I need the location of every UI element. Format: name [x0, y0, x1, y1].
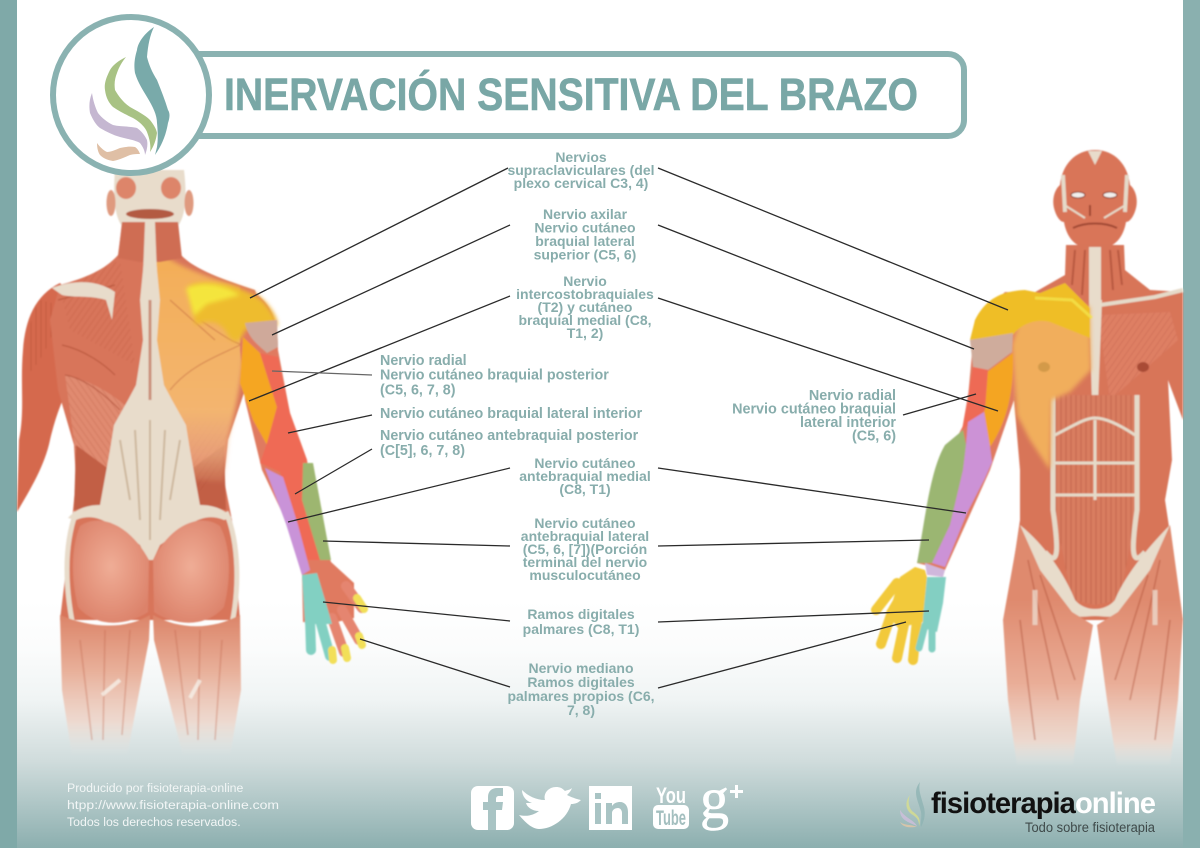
back of arm, right side	[240, 285, 354, 624]
label: ramos digitales: Ramos digitales	[527, 606, 635, 622]
green zone	[302, 463, 331, 560]
footer credits: Todos los derechos reservados.	[67, 815, 241, 829]
upper back muscle fibres	[60, 260, 135, 365]
label: antebraquial posterior: (C[5], 6, 7, 8)	[380, 443, 465, 459]
clavicle	[1100, 290, 1183, 305]
logo flame green	[105, 57, 157, 152]
logo flame teal	[134, 27, 170, 155]
hand red fingers	[332, 586, 362, 652]
taupe zone front	[970, 333, 1013, 370]
green zone front	[917, 430, 966, 563]
orange chest zone	[1012, 306, 1091, 470]
label: radial right: Nervio radial	[809, 388, 896, 404]
shoulder gold zone	[190, 283, 277, 341]
label: radial right: (C5, 6)	[852, 428, 896, 444]
label: axilar: Nervio axilar	[543, 206, 628, 222]
label: radial posterior: Nervio cutáneo braquial posterior	[380, 368, 609, 384]
orange arm zone	[240, 337, 277, 445]
label: intercostobraquiales: intercostobraquiales	[516, 286, 654, 302]
footer credits: htpp://www.fisioterapia-online.com	[67, 798, 279, 812]
teal zone	[302, 573, 332, 624]
label: antebraquial medial: Nervio cutáneo	[534, 455, 636, 471]
head front	[1053, 150, 1137, 246]
icon: youtube	[653, 783, 689, 830]
glutes	[73, 520, 149, 623]
brand logo	[900, 782, 1156, 835]
label: nervio mediano: 7, 8)	[567, 702, 595, 718]
back torso	[50, 225, 270, 620]
label: supraclaviculares: supraclaviculares (del	[507, 162, 655, 178]
logo flame tan	[97, 143, 140, 161]
figure: back view of the body	[17, 170, 364, 756]
right thigh	[1097, 525, 1183, 766]
spine tendon	[68, 250, 232, 560]
label: radial right: Nervio cutáneo braquial	[732, 402, 896, 418]
page background gradient	[0, 600, 1200, 848]
brand name: fisioterapiaonline	[931, 787, 1155, 820]
icon: youtube: You	[656, 783, 686, 808]
orange back zone	[150, 255, 277, 482]
label: supraclaviculares: Nervios	[555, 149, 607, 165]
label: nervio mediano: palmares propios (C6,	[507, 688, 655, 704]
chest right half	[1098, 312, 1178, 400]
torso and neck front	[1005, 245, 1183, 620]
label: radial posterior: Nervio radial	[380, 353, 467, 369]
back arm, left side	[17, 283, 75, 512]
central tendon	[1089, 300, 1102, 405]
label: ramos digitales: palmares (C8, T1)	[523, 621, 639, 637]
abdominals	[1052, 395, 1138, 605]
label: axilar: Nervio cutáneo	[534, 220, 636, 236]
logo circle	[53, 17, 209, 173]
purple zone	[265, 468, 310, 575]
label: antebraquial lateral: terminal del nervio	[523, 554, 647, 570]
left-aligned labels	[380, 353, 643, 459]
label: nervio mediano: Ramos digitales	[527, 674, 635, 690]
teal zone front	[919, 577, 946, 649]
yellow hand zone	[876, 567, 927, 660]
label: radial right	[732, 388, 896, 444]
head back	[114, 170, 186, 240]
centre labels	[507, 149, 655, 718]
purple zone front	[932, 412, 992, 567]
icon: facebook	[471, 786, 514, 830]
brand mark	[900, 782, 925, 827]
red zone front	[962, 367, 988, 430]
leader lines	[249, 168, 1008, 688]
label: antebraquial lateral: Nervio cutáneo	[534, 515, 636, 531]
label: antebraquial lateral: antebraquial lateral	[521, 528, 649, 544]
label: intercostobraquiales: (T2) y cutáneo	[538, 299, 632, 315]
label: supraclaviculares: plexo cervical C3, 4)	[514, 175, 648, 191]
wrist lavender zone	[925, 563, 945, 577]
arm base front	[917, 292, 1032, 570]
logo flame purple	[89, 93, 147, 155]
yellow shoulder highlight	[186, 284, 240, 316]
label: axilar: superior (C5, 6)	[534, 246, 636, 262]
hamstrings	[60, 615, 150, 756]
title: INERVACIÓN SENSITIVA DEL BRAZO	[224, 69, 918, 120]
footer credits: Producido por fisioterapia-online	[67, 781, 244, 795]
label: intercostobraquiales: braquial medial (C8,	[518, 312, 652, 328]
icon: youtube: Tube	[656, 807, 686, 830]
label: lateral interior: Nervio cutáneo braquial lateral interior	[380, 406, 643, 422]
left side bar	[0, 0, 17, 848]
label: nervio mediano: Nervio mediano	[528, 660, 634, 676]
yellow shoulder zone front	[970, 283, 1090, 340]
brand tagline: Todo sobre fisioterapia	[1025, 820, 1156, 835]
label: intercostobraquiales: Nervio	[563, 273, 607, 289]
orange arm zone front	[984, 353, 1013, 447]
left thigh	[1003, 525, 1093, 766]
icon: google plus: g	[700, 766, 729, 831]
taupe zone	[245, 320, 278, 353]
social icons	[471, 766, 743, 831]
yellow finger tips	[332, 598, 364, 660]
label: axilar: braquial lateral	[535, 233, 635, 249]
red zone	[260, 353, 320, 560]
label: intercostobraquiales: T1, 2)	[567, 325, 603, 341]
right side bar	[1183, 0, 1200, 848]
label: radial right: lateral interior	[800, 415, 896, 431]
neck tendon	[1089, 247, 1101, 300]
neck	[118, 222, 182, 262]
figure: front view of the body	[876, 150, 1183, 766]
title frame	[170, 54, 964, 136]
hip tendon edges	[67, 512, 237, 640]
icon: twitter	[519, 787, 581, 829]
label: antebraquial lateral: musculocutáneo	[529, 567, 641, 583]
label: antebraquial posterior: Nervio cutáneo antebraquial posterior	[380, 428, 639, 444]
scapula tendon	[52, 282, 115, 320]
label: radial posterior: (C5, 6, 7, 8)	[380, 382, 456, 398]
label: antebraquial medial: (C8, T1)	[559, 481, 611, 497]
icon: linkedin	[589, 786, 632, 830]
footer credits	[67, 781, 279, 829]
icon: google plus	[700, 766, 743, 831]
label: antebraquial medial: antebraquial medial	[519, 468, 651, 484]
inguinal tendon	[1020, 525, 1170, 617]
label: antebraquial lateral: (C5, 6, [7])(Porción	[523, 541, 647, 557]
